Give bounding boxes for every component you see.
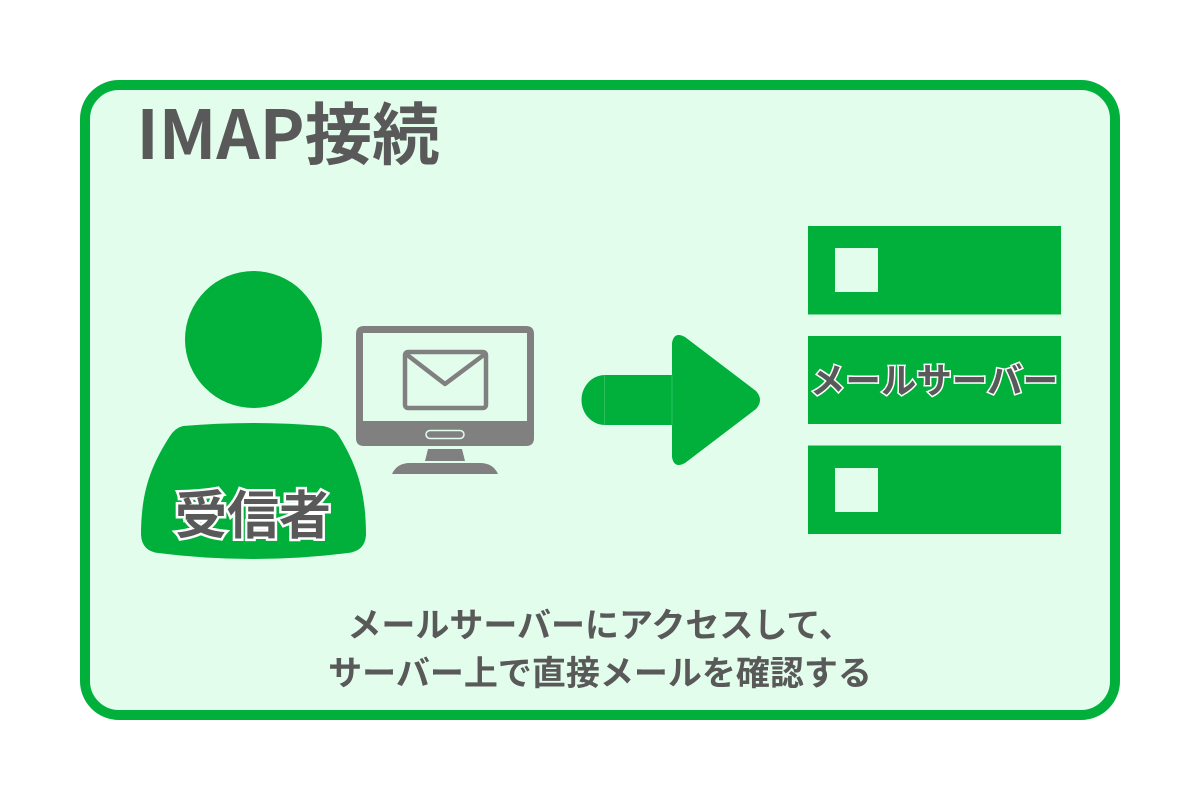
- panel: IMAP connection: [85, 85, 1115, 715]
- server indicator bottom: [835, 468, 878, 512]
- monitor base: [392, 463, 498, 474]
- icon: recipient person: [141, 271, 366, 559]
- recipient label: 受信者: [175, 474, 331, 549]
- mail server: [808, 226, 1061, 534]
- envelope: [405, 352, 486, 408]
- caption line 1: メールサーバーにアクセスして、: [347, 598, 853, 647]
- caption: [328, 598, 872, 695]
- server unit top: [808, 226, 1061, 314]
- arrow: [582, 335, 760, 465]
- server unit bottom: [808, 446, 1061, 534]
- arrow seams: [604, 375, 672, 425]
- arrow shape: [582, 335, 760, 465]
- caption line 2: サーバー上で直接メールを確認する: [328, 646, 872, 695]
- server indicator top: [835, 248, 878, 292]
- monitor button: [426, 430, 464, 438]
- server label: メールサーバー: [810, 353, 1058, 404]
- monitor stand: [425, 449, 465, 461]
- server unit middle: [808, 336, 1061, 424]
- icon: computer with mail: [356, 326, 534, 474]
- monitor: [356, 326, 534, 446]
- person head: [185, 271, 322, 408]
- title: IMAP接続: [136, 82, 440, 179]
- person body: [141, 423, 366, 559]
